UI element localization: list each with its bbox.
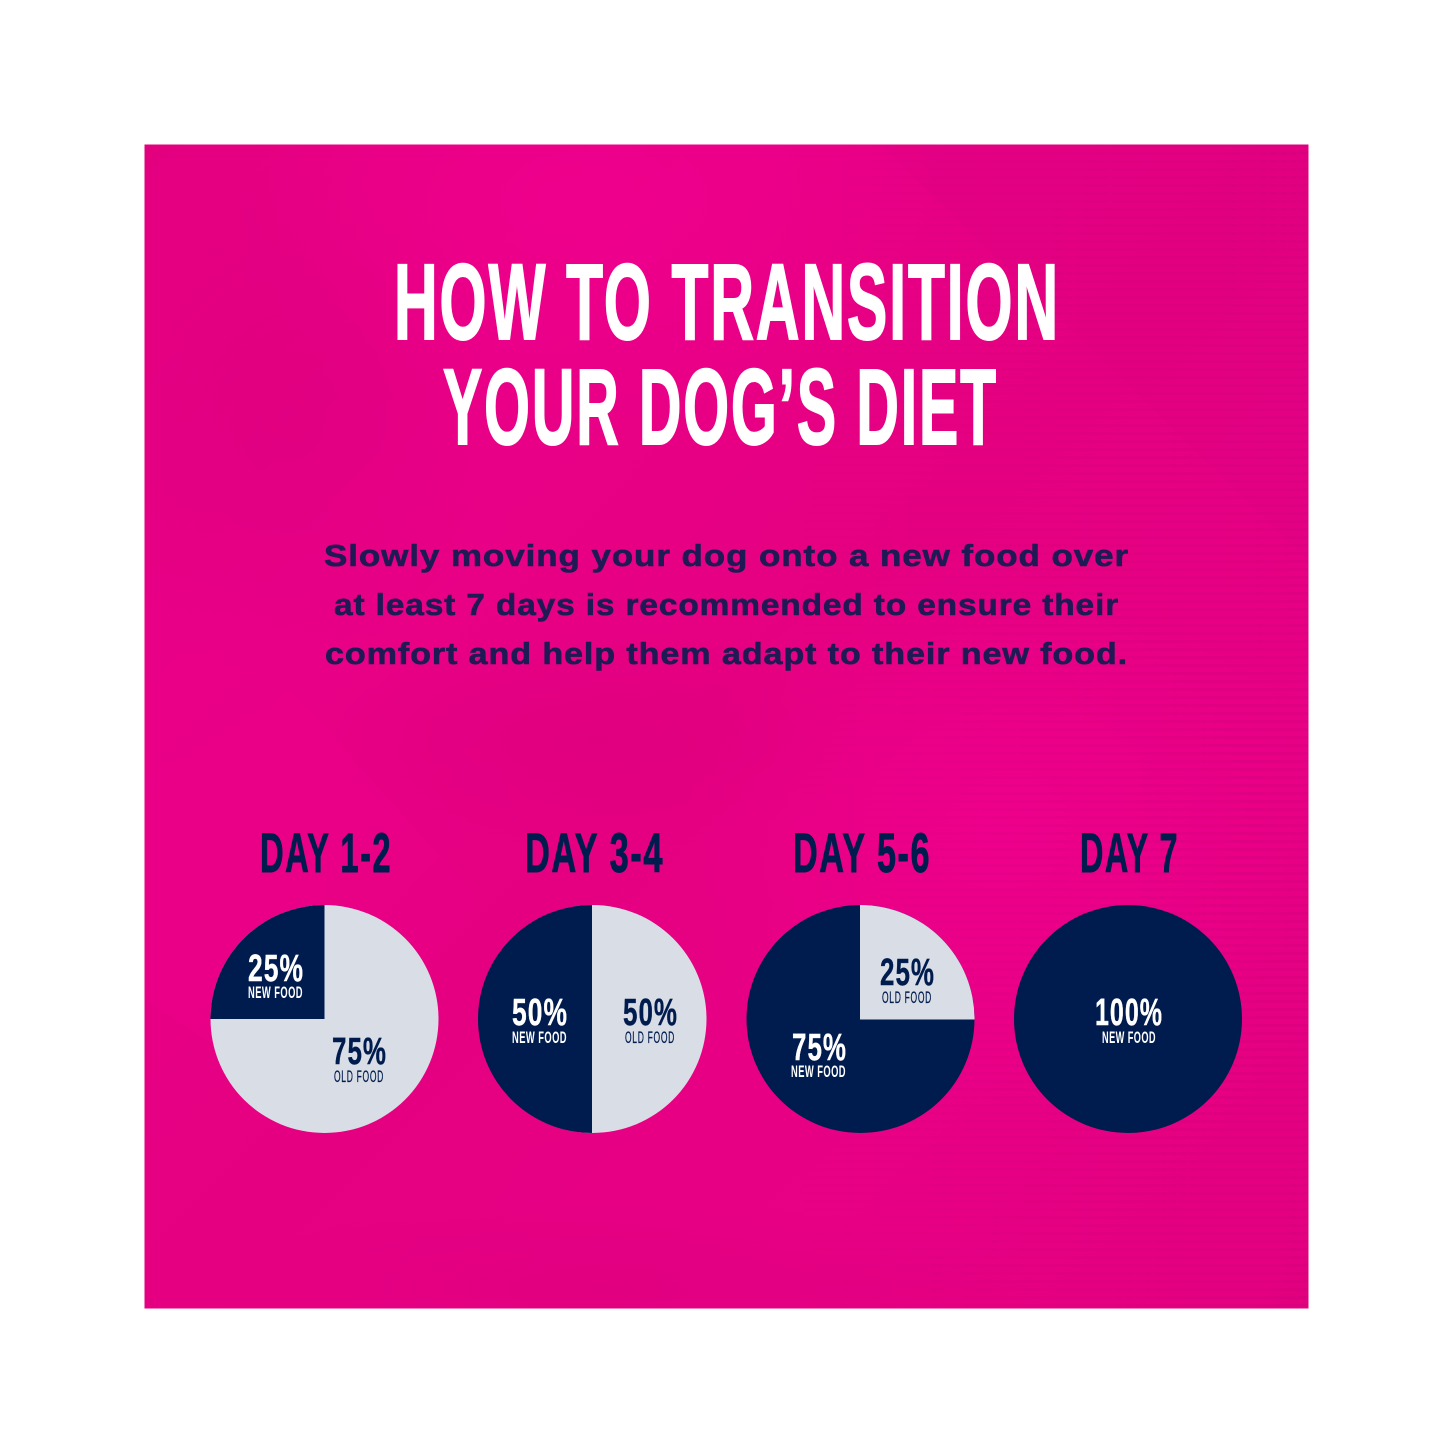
intro text: Slowly moving your dog onto a new food over [324, 538, 1129, 573]
pie chart: 50% new, 50% old: 50% [512, 992, 568, 1034]
pie chart: 50% new, 50% old [478, 905, 706, 1133]
panel: day 1-2 [210, 821, 438, 1133]
pie chart: 50% new, 50% old: OLD FOOD [625, 1028, 675, 1047]
pie chart: 75% new, 25% old [746, 905, 975, 1133]
heading: day 5-6: DAY 5-6 [793, 821, 931, 884]
intro text: comfort and help them adapt to their new food. [325, 636, 1128, 671]
pie chart: 100% new [1014, 905, 1242, 1133]
title: YOUR DOG’S DIET [443, 346, 998, 467]
pie chart: 25% new, 75% old [210, 905, 438, 1133]
pie chart: 25% new, 75% old: 25% [248, 948, 304, 990]
panel: pink background [144, 144, 1308, 1308]
pie chart: 25% new, 75% old: NEW FOOD [248, 983, 303, 1002]
title [394, 241, 1060, 467]
pie chart: 25% new, 75% old: OLD FOOD [334, 1067, 384, 1086]
pie chart: 50% new, 50% old: 50% [623, 992, 678, 1034]
panel: day 3-4 [478, 821, 706, 1133]
panel: day 5-6 [746, 821, 975, 1133]
pie chart: 75% new, 25% old: 25% [880, 952, 935, 994]
pie chart: 25% new, 75% old: 75% [332, 1031, 387, 1073]
pie chart: 75% new, 25% old: 75% [792, 1027, 847, 1069]
pie chart: 75% new, 25% old: NEW FOOD [791, 1062, 846, 1081]
pie chart: 50% new, 50% old: NEW FOOD [512, 1028, 567, 1047]
heading: day 1-2: DAY 1-2 [260, 821, 392, 884]
panel: day 7 [1014, 821, 1242, 1133]
pie chart: 100% new: 100% [1095, 992, 1163, 1034]
intro text [324, 538, 1129, 671]
heading: day 3-4: DAY 3-4 [525, 821, 664, 884]
intro text: at least 7 days is recommended to ensure their [334, 587, 1119, 622]
heading: day 7: DAY 7 [1080, 821, 1179, 884]
pie chart: 75% new, 25% old: OLD FOOD [882, 988, 932, 1007]
pie chart: 100% new: NEW FOOD [1102, 1028, 1156, 1047]
